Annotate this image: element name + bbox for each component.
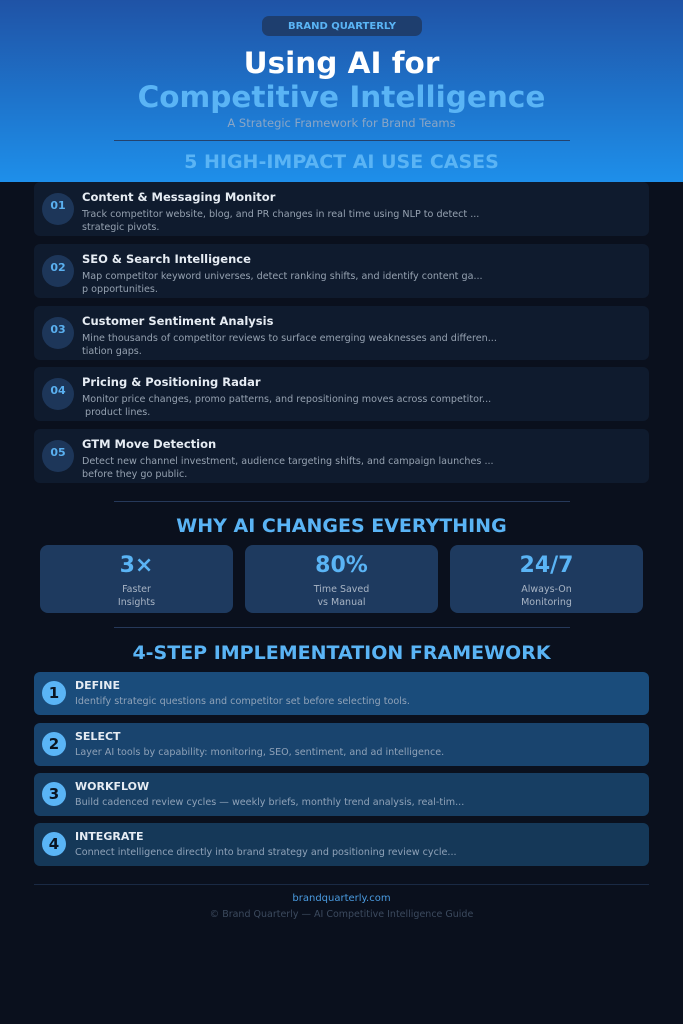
card 01: strategic pivots. xyxy=(82,222,159,233)
footer url: brandquarterly.com xyxy=(292,893,391,904)
card 01: Content & Messaging Monitor xyxy=(82,190,275,204)
section heading: why AI: WHY AI CHANGES EVERYTHING xyxy=(176,515,507,537)
step 1: 1 xyxy=(49,684,59,702)
card 01 xyxy=(34,182,649,236)
stat 24/7: 24/7 xyxy=(520,553,573,578)
card 05: Detect new channel investment, audience targeting shifts, and campaign launches ... xyxy=(82,456,494,467)
card 02 xyxy=(34,244,649,298)
card 05: 05 xyxy=(50,446,66,459)
card 03: tiation gaps. xyxy=(82,346,142,357)
badge: BRAND QUARTERLY xyxy=(288,21,396,32)
card 01: 01 xyxy=(50,199,66,212)
step 1: DEFINE xyxy=(75,679,120,692)
section heading: framework: 4-STEP IMPLEMENTATION FRAMEWORK xyxy=(132,642,551,664)
card 04: 04 xyxy=(50,384,66,397)
stat 80%: Time Saved xyxy=(314,584,369,595)
step 2: SELECT xyxy=(75,730,121,743)
stat 3x: 3× xyxy=(120,553,153,578)
step 3: WORKFLOW xyxy=(75,780,149,793)
card 03 xyxy=(34,306,649,360)
card 04: Pricing & Positioning Radar xyxy=(82,375,261,389)
footer copyright: © Brand Quarterly — AI Competitive Intelligence Guide xyxy=(210,909,473,920)
step 4: 4 xyxy=(49,835,59,853)
stat 3x xyxy=(40,545,233,613)
card 04: Monitor price changes, promo patterns, and repositioning moves across competitor... xyxy=(82,394,491,405)
steps xyxy=(34,672,649,866)
step 4: INTEGRATE xyxy=(75,830,144,843)
step 1 xyxy=(34,672,649,715)
stats xyxy=(40,545,643,613)
card 02: SEO & Search Intelligence xyxy=(82,252,251,266)
badge xyxy=(262,16,422,36)
step 2: Layer AI tools by capability: monitoring, SEO, sentiment, and ad intelligence. xyxy=(75,747,444,758)
stat 24/7 xyxy=(450,545,643,613)
card 05 xyxy=(34,429,649,483)
title: Using AI for xyxy=(244,46,439,80)
header background xyxy=(0,0,683,182)
card 02: 02 xyxy=(50,261,66,274)
step 2: 2 xyxy=(49,735,59,753)
stat 24/7: Always-On xyxy=(521,584,572,595)
card 02: p opportunities. xyxy=(82,284,158,295)
section heading: use cases: 5 HIGH-IMPACT AI USE CASES xyxy=(184,151,499,173)
card 04 xyxy=(34,367,649,421)
stat 80% xyxy=(245,545,438,613)
step 1: Identify strategic questions and competitor set before selecting tools. xyxy=(75,696,410,707)
stat 3x: Insights xyxy=(118,597,155,608)
card 03: Mine thousands of competitor reviews to surface emerging weaknesses and differen... xyxy=(82,333,497,344)
stat 80%: vs Manual xyxy=(317,597,366,608)
step 3: 3 xyxy=(49,785,59,803)
subtitle: A Strategic Framework for Brand Teams xyxy=(227,116,456,130)
stat 3x: Faster xyxy=(122,584,151,595)
step 3 xyxy=(34,773,649,816)
stat 80%: 80% xyxy=(315,553,368,578)
step 3: Build cadenced review cycles — weekly briefs, monthly trend analysis, real-tim... xyxy=(75,797,464,808)
card 03: Customer Sentiment Analysis xyxy=(82,314,273,328)
card 05: GTM Move Detection xyxy=(82,437,216,451)
card 01: Track competitor website, blog, and PR changes in real time using NLP to detect ... xyxy=(82,209,479,220)
step 4 xyxy=(34,823,649,866)
title line 2: Competitive Intelligence xyxy=(138,80,545,114)
card 03: 03 xyxy=(50,323,66,336)
card 02: Map competitor keyword universes, detect ranking shifts, and identify content ga... xyxy=(82,271,483,282)
card 04: product lines. xyxy=(85,407,150,418)
card 05: before they go public. xyxy=(82,469,187,480)
step 4: Connect intelligence directly into brand strategy and positioning review cycle... xyxy=(75,847,457,858)
use case cards xyxy=(34,182,649,483)
stat 24/7: Monitoring xyxy=(521,597,572,608)
step 2 xyxy=(34,723,649,766)
